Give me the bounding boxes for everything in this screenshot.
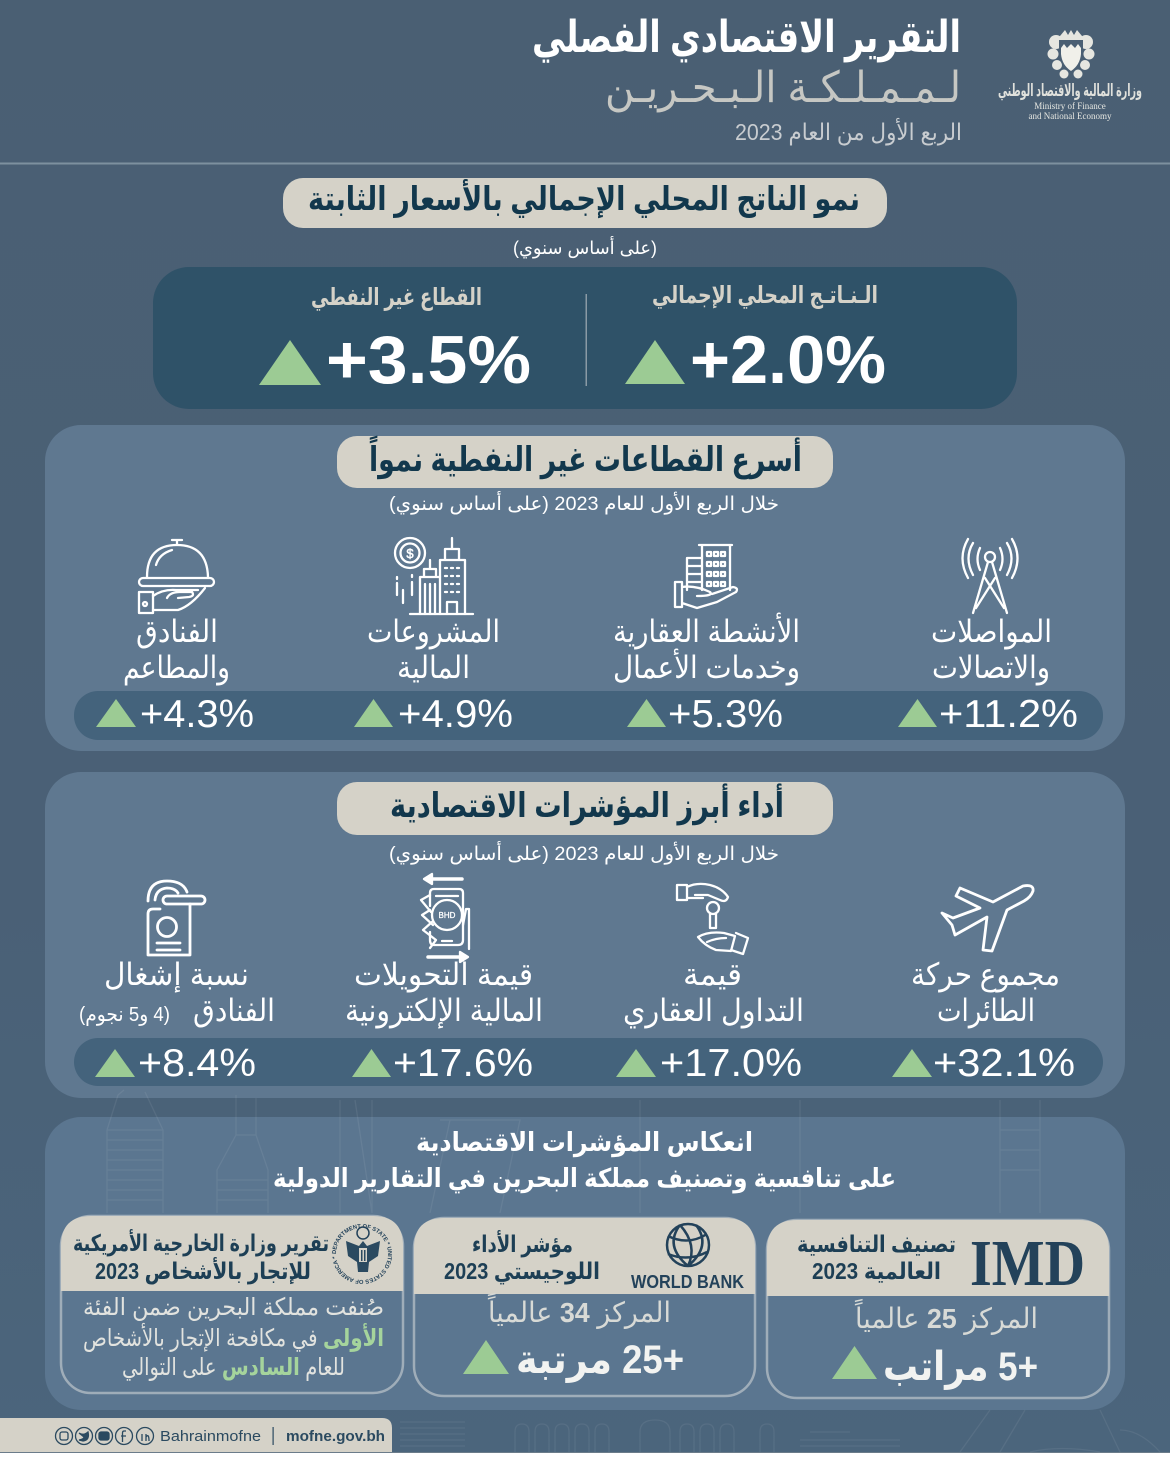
card: us state department [60, 1214, 404, 1394]
bar: indicator values: +32.1% [933, 1042, 1075, 1085]
header [532, 13, 1142, 146]
heading pill: indicators: أداء أبرز المؤشرات الاقتصادية [390, 783, 784, 826]
label: real estate trading: التداول العقاري [623, 993, 804, 1029]
heading pill: gdp [283, 178, 887, 228]
icon: door hanger [148, 881, 205, 955]
non-oil stat [259, 284, 531, 398]
panel: fastest growing non-oil sectors [45, 425, 1125, 751]
bar: sector values [74, 691, 1103, 740]
icon: hand with key [677, 884, 748, 954]
label: hotels: والمطاعم [123, 650, 230, 686]
label: finance [367, 614, 500, 685]
period note: خلال الربع الأول للعام 2023 (على أساس سنوي) [389, 491, 779, 515]
bar: indicator values: +8.4% [138, 1042, 256, 1085]
bar: indicator values: +17.6% [393, 1042, 533, 1085]
label: real estate: وخدمات الأعمال [613, 648, 800, 686]
label: e-transfers: المالية الإلكترونية [345, 993, 543, 1029]
icon: phone transfer: BHD [439, 911, 456, 920]
label: real estate trading: قيمة [683, 957, 742, 992]
card: imd [767, 1220, 1109, 1398]
gdp stat: +2.0% [690, 322, 886, 398]
bar: sector values: +4.9% [398, 693, 513, 736]
icon: finance towers: $ [406, 546, 414, 561]
card heading: مؤشر الأداء [472, 1229, 573, 1258]
label: aircraft movements: الطائرات [937, 993, 1035, 1029]
heading: على تنافسية وتصنيف مملكة البحرين في التقارير الدولية [273, 1163, 896, 1194]
icon: serving dome [139, 540, 214, 613]
heading: انعكاس المؤشرات الاقتصادية [416, 1127, 753, 1158]
subtitle: kingdom of bahrain: لـمـمـلـكـة الـبـحـريـن [605, 64, 961, 113]
non-oil stat: +3.5% [326, 322, 531, 398]
label: aircraft movements: مجموع حركة [911, 957, 1060, 993]
label: hotels: الفنادق [136, 614, 218, 649]
card text: صُنفت مملكة البحرين ضمن الفئة [83, 1294, 384, 1321]
card: world bank [414, 1218, 755, 1396]
icon: finance towers [395, 538, 473, 614]
label: hotels [123, 614, 230, 686]
card heading: تصنيف التنافسية [797, 1231, 956, 1257]
label: real estate trading [623, 957, 804, 1029]
logo: world bank [631, 1224, 744, 1292]
change: +25 مرتبة [516, 1338, 684, 1383]
heading pill: sectors [337, 435, 833, 488]
change: +5 مراتب [883, 1345, 1038, 1390]
card text: الأولى في مكافحة الإتجار بالأشخاص [83, 1323, 384, 1352]
panel: gdp values [153, 267, 1017, 409]
section: gdp growth [153, 178, 1017, 409]
heading pill: sectors: أسرع القطاعات غير النفطية نمواً [369, 435, 802, 480]
label: hotel occupancy: الفنادق [193, 993, 275, 1028]
bar: sector values: +5.3% [668, 693, 783, 736]
period: الربع الأول من العام 2023 [735, 118, 962, 146]
bar: sector values: +11.2% [939, 693, 1078, 736]
gdp stat [625, 282, 886, 398]
icon: phone transfer [421, 874, 469, 962]
label: finance: المالية [397, 650, 470, 685]
social icons [56, 1428, 154, 1444]
icon: telecom tower [962, 539, 1018, 613]
icon: building in hand [675, 545, 737, 608]
bar: indicator values: +17.0% [660, 1042, 802, 1085]
logo: ministry of finance: Ministry of Finance [1034, 101, 1106, 111]
card heading: تقرير وزارة الخارجية الأمريكية [73, 1228, 329, 1257]
card heading [73, 1228, 329, 1285]
rank: المركز 34 عالمياً [488, 1292, 671, 1329]
footer: mofne.gov.bh [286, 1428, 385, 1445]
label: hotel occupancy: (4 و5 نجوم) [79, 1004, 170, 1026]
card heading [797, 1231, 956, 1284]
heading pill: indicators [337, 782, 833, 835]
icon: airplane [942, 886, 1033, 951]
non-oil stat: القطاع غير النفطي [311, 284, 482, 311]
label: real estate [613, 612, 800, 686]
label: telecom [931, 614, 1052, 686]
logo: ministry of finance [998, 30, 1142, 121]
card heading [444, 1229, 600, 1285]
gdp stat: الـنـاتـج المحلي الإجمالي [652, 282, 878, 309]
label: e-transfers: قيمة التحويلات [354, 957, 533, 993]
label: aircraft movements [911, 957, 1060, 1029]
footer: Bahrainmofne [160, 1428, 261, 1445]
logo: department of state seal: DEPARTMENT OF STATE * UNITED STATES OF AMERICA * [332, 1224, 392, 1284]
card heading: اللوجيستي 2023 [444, 1258, 600, 1285]
period note: خلال الربع الأول للعام 2023 (على أساس سنوي) [389, 841, 779, 865]
card text [83, 1294, 384, 1381]
label: telecom: المواصلات [931, 614, 1052, 650]
heading pill: gdp: نمو الناتج المحلي الإجمالي بالأسعار الثابتة [308, 178, 860, 219]
heading [273, 1127, 896, 1194]
bar: indicator values [74, 1038, 1103, 1086]
label: hotel occupancy: نسبة إشغال [104, 957, 249, 993]
rank: المركز 25 عالمياً [855, 1298, 1038, 1335]
panel: key economic indicators [45, 772, 1125, 1098]
label: telecom: والاتصالات [932, 650, 1050, 686]
card heading: للإتجار بالأشخاص 2023 [95, 1256, 311, 1285]
label: hotel occupancy [79, 957, 275, 1028]
yoy note: (على أساس سنوي) [513, 236, 657, 259]
card heading: العالمية 2023 [812, 1258, 941, 1284]
bar: sector values: +4.3% [140, 693, 254, 736]
label: finance: المشروعات [367, 614, 500, 650]
footer [0, 1418, 392, 1452]
panel: competitiveness rankings [45, 1090, 1125, 1410]
label: e-transfers [345, 957, 543, 1029]
card text: للعام السادس على التوالي [122, 1354, 345, 1381]
logo: world bank: WORLD BANK [631, 1272, 744, 1292]
label: real estate: الأنشطة العقارية [613, 612, 800, 650]
logo: ministry of finance: and National Economy [1029, 111, 1112, 121]
title: التقرير الاقتصادي الفصلي [532, 13, 961, 63]
logo: imd: IMD [970, 1227, 1085, 1300]
